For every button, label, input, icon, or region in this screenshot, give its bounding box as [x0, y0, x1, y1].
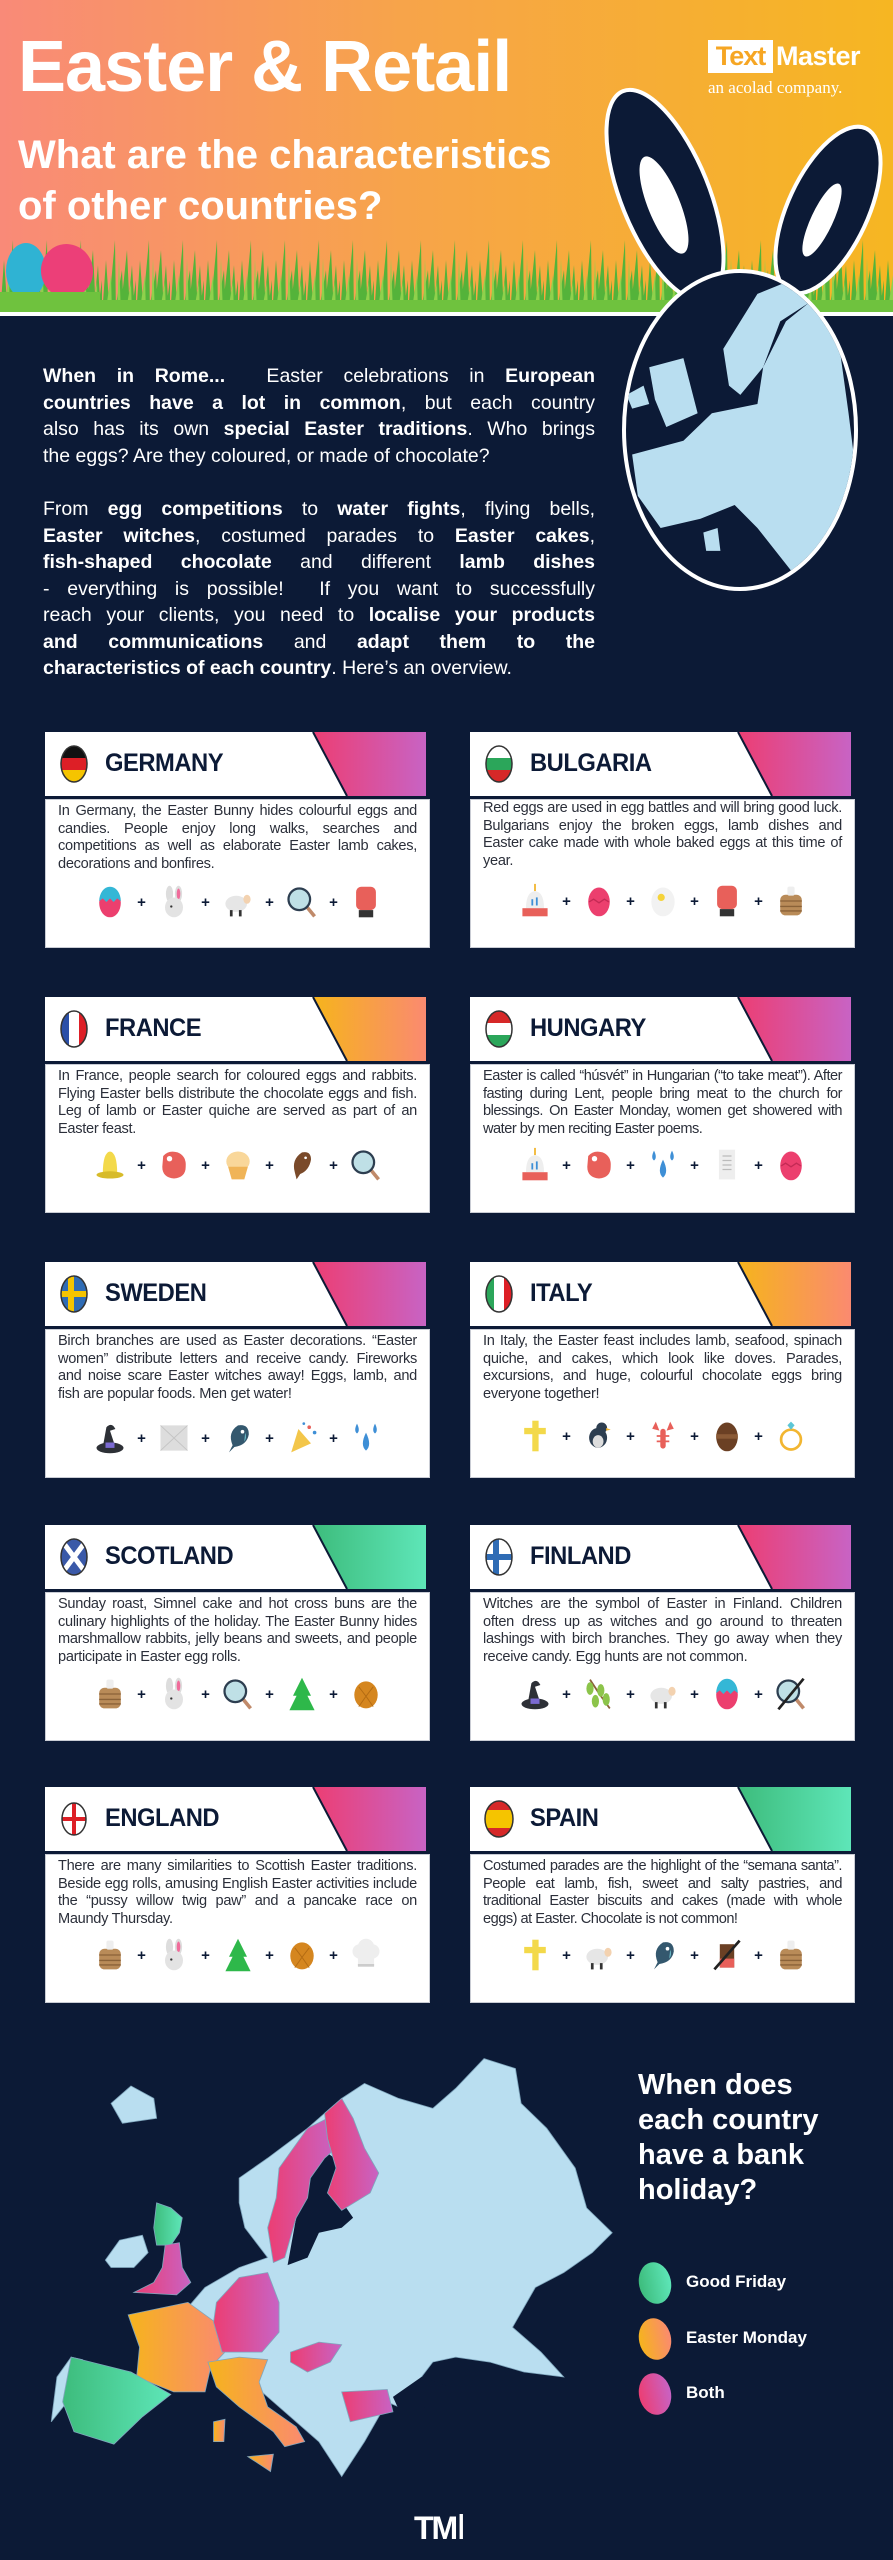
card: Italy [470, 1262, 855, 1478]
card: Germany [45, 732, 430, 948]
card: Bulgaria: Red eggs are used in egg battles and will bring good luck. Bulgarians enjoy the broken eggs, lamb dishes and Easter cake made with whole baked eggs at this time of year. [483, 800, 842, 869]
card: Hungary: + [754, 1156, 763, 1174]
card: Sweden: + [201, 1430, 210, 1446]
intro paragraph 2 [43, 498, 595, 679]
card: Spain [470, 1787, 855, 2003]
card: Scotland [45, 1525, 430, 1741]
title: Easter & Retail [18, 27, 511, 107]
legend: Both [638, 2373, 725, 2415]
subtitle: of other countries? [18, 184, 382, 228]
card: Germany: + [329, 894, 338, 910]
intro paragraph 2: and communications and adapt them to the [43, 630, 595, 652]
card: Italy: + [754, 1428, 763, 1444]
card: England: + [329, 1946, 338, 1964]
card: England: + [201, 1946, 210, 1964]
intro text: When in Rome... Easter celebrations in European [43, 365, 595, 387]
legend: Good Friday: Good Friday [686, 2272, 786, 2291]
card: Hungary: + [562, 1156, 571, 1174]
map title: holiday? [638, 2174, 757, 2206]
card: France: FRANCE [105, 1014, 201, 1042]
legend: Both: Both [686, 2383, 725, 2402]
intro paragraph 2: characteristics of each country. Here’s an overview. [43, 657, 512, 679]
card: Finland: + [562, 1686, 571, 1702]
logo: Text [716, 41, 765, 71]
card: Sweden: Birch branches are used as Easter decorations. “Easter women” distribute letters and receive candy. Fireworks and noise scare Easter witches away! Eggs, lamb, and fish are popular foods. Men get water! [58, 1333, 417, 1402]
card: France: + [265, 1156, 274, 1174]
card: England: + [137, 1946, 146, 1964]
card: Hungary: + [690, 1156, 699, 1174]
intro paragraph 2: - everything is possible! If you want to successfully [43, 578, 595, 600]
card: France: + [201, 1156, 210, 1174]
legend [638, 2262, 807, 2415]
card: Hungary: + [626, 1156, 635, 1174]
footer logo: TMI [414, 2506, 464, 2547]
legend: Easter Monday: Easter Monday [686, 2328, 807, 2347]
card: Germany: + [201, 894, 210, 910]
card: Germany: + [265, 894, 274, 910]
grass [0, 240, 893, 312]
card: Scotland: + [265, 1686, 274, 1702]
card: Finland: + [690, 1686, 699, 1702]
intro paragraph 2: From egg competitions to water fights, flying bells, [43, 498, 595, 520]
card: Italy: + [690, 1428, 699, 1444]
header banner [0, 0, 893, 316]
card: Bulgaria: + [690, 892, 699, 910]
card: Spain: SPAIN [530, 1804, 598, 1832]
card: Scotland: + [137, 1686, 146, 1702]
card: Spain: + [562, 1946, 571, 1964]
card: Hungary: HUNGARY [530, 1014, 646, 1042]
map title: each country [638, 2104, 818, 2136]
card: Scotland: + [201, 1686, 210, 1702]
icon: eggs in grass [0, 243, 100, 300]
card: Bulgaria: + [754, 892, 763, 910]
legend: Good Friday [638, 2262, 786, 2304]
card: Italy: In Italy, the Easter feast includes lamb, seafood, spinach quiche, and cakes, which look like doves. Parades, excursions, and huge, colourful chocolate eggs bring everyone together! [483, 1333, 842, 1402]
card: France: In France, people search for coloured eggs and rabbits. Flying Easter bells distribute the chocolate eggs and fish. Leg of lamb or Easter quiche are served as part of an Easter feast. [58, 1068, 417, 1137]
legend: Easter Monday [638, 2318, 807, 2360]
card: Finland: + [626, 1686, 635, 1702]
card: Hungary [470, 997, 855, 1213]
card: Germany: GERMANY [105, 749, 223, 777]
card: Spain: Costumed parades are the highlight of the “semana santa”. People eat lamb, fish, sweet and salty pastries, and traditional Easter biscuits and cakes (made with whole eggs) at Easter. Chocolate is not common! [483, 1858, 842, 1927]
card: Bulgaria: + [626, 892, 635, 910]
card: Bulgaria [470, 732, 855, 948]
card: France: + [137, 1156, 146, 1174]
card: Scotland: SCOTLAND [105, 1542, 233, 1570]
intro paragraph 2: reach your clients, you need to localise your products [43, 604, 595, 626]
intro text [43, 365, 595, 466]
intro text: countries have a lot in common, but each country [43, 392, 595, 414]
map title: When does [638, 2069, 793, 2101]
map title: have a bank [638, 2139, 804, 2171]
card: Germany: In Germany, the Easter Bunny hides colourful eggs and candies. People enjoy long walks, searches and competitions as well as elaborate Easter lamb cakes, decorations and bonfires. [58, 803, 417, 872]
logo: Master [776, 41, 860, 71]
subtitle: What are the characteristics [18, 133, 552, 177]
card: Hungary: Easter is called “húsvét” in Hungarian (“to take meat”). After fasting during Lent, people bring meat to the church for blessings. On Easter Monday, women get showered with water by men reciting Easter poems. [483, 1068, 842, 1137]
map title [638, 2069, 818, 2206]
card: Finland [470, 1525, 855, 1741]
card: Finland: FINLAND [530, 1542, 631, 1570]
card: Sweden: + [329, 1430, 338, 1446]
intro paragraph 2: Easter witches, costumed parades to Easter cakes, [43, 524, 595, 546]
card: Italy: + [626, 1428, 635, 1444]
intro text: the eggs? Are they coloured, or made of chocolate? [43, 444, 490, 466]
intro text: also has its own special Easter traditions. Who brings [43, 418, 595, 440]
card: Finland: + [754, 1686, 763, 1702]
card: Sweden: + [137, 1430, 146, 1446]
egg with bunny ears and Europe map [604, 88, 883, 591]
card: Spain: + [626, 1946, 635, 1964]
card: Bulgaria: BULGARIA [530, 749, 652, 777]
logo: an acolad company. [708, 78, 842, 97]
card: Sweden: + [265, 1430, 274, 1446]
intro paragraph 2: fish-shaped chocolate and different lamb dishes [43, 551, 595, 573]
card: Bulgaria: + [562, 892, 571, 910]
card: Scotland: Sunday roast, Simnel cake and hot cross buns are the culinary highlights of the holiday. The Easter Bunny hides marshmallow rabbits, jelly beans and sweets, and people participate in Easter egg rolls. [58, 1596, 417, 1665]
logo [708, 40, 860, 97]
card: England [45, 1787, 430, 2003]
card: England: ENGLAND [105, 1804, 219, 1832]
card: Germany: + [137, 894, 146, 910]
card: Italy: + [562, 1428, 571, 1444]
card: France: + [329, 1156, 338, 1174]
card: France [45, 997, 430, 1213]
card: England: + [265, 1946, 274, 1964]
map: bank holidays in Europe [50, 2058, 613, 2478]
card: Sweden [45, 1262, 430, 1478]
card: Scotland: + [329, 1686, 338, 1702]
card: Sweden: SWEDEN [105, 1279, 206, 1307]
card: England: There are many similarities to Scottish Easter traditions. Beside egg rolls, amusing English Easter activities include the “pussy willow twig paw” and a pancake race on Maundy Thursday. [58, 1858, 417, 1927]
card: Finland: Witches are the symbol of Easter in Finland. Children often dress up as witches and go around to threaten lashings with birch branches. They go away when they receive candy. Egg hunts are not common. [483, 1596, 842, 1665]
card: Spain: + [690, 1946, 699, 1964]
subtitle [18, 133, 552, 228]
card: Spain: + [754, 1946, 763, 1964]
card: Italy: ITALY [530, 1279, 592, 1307]
